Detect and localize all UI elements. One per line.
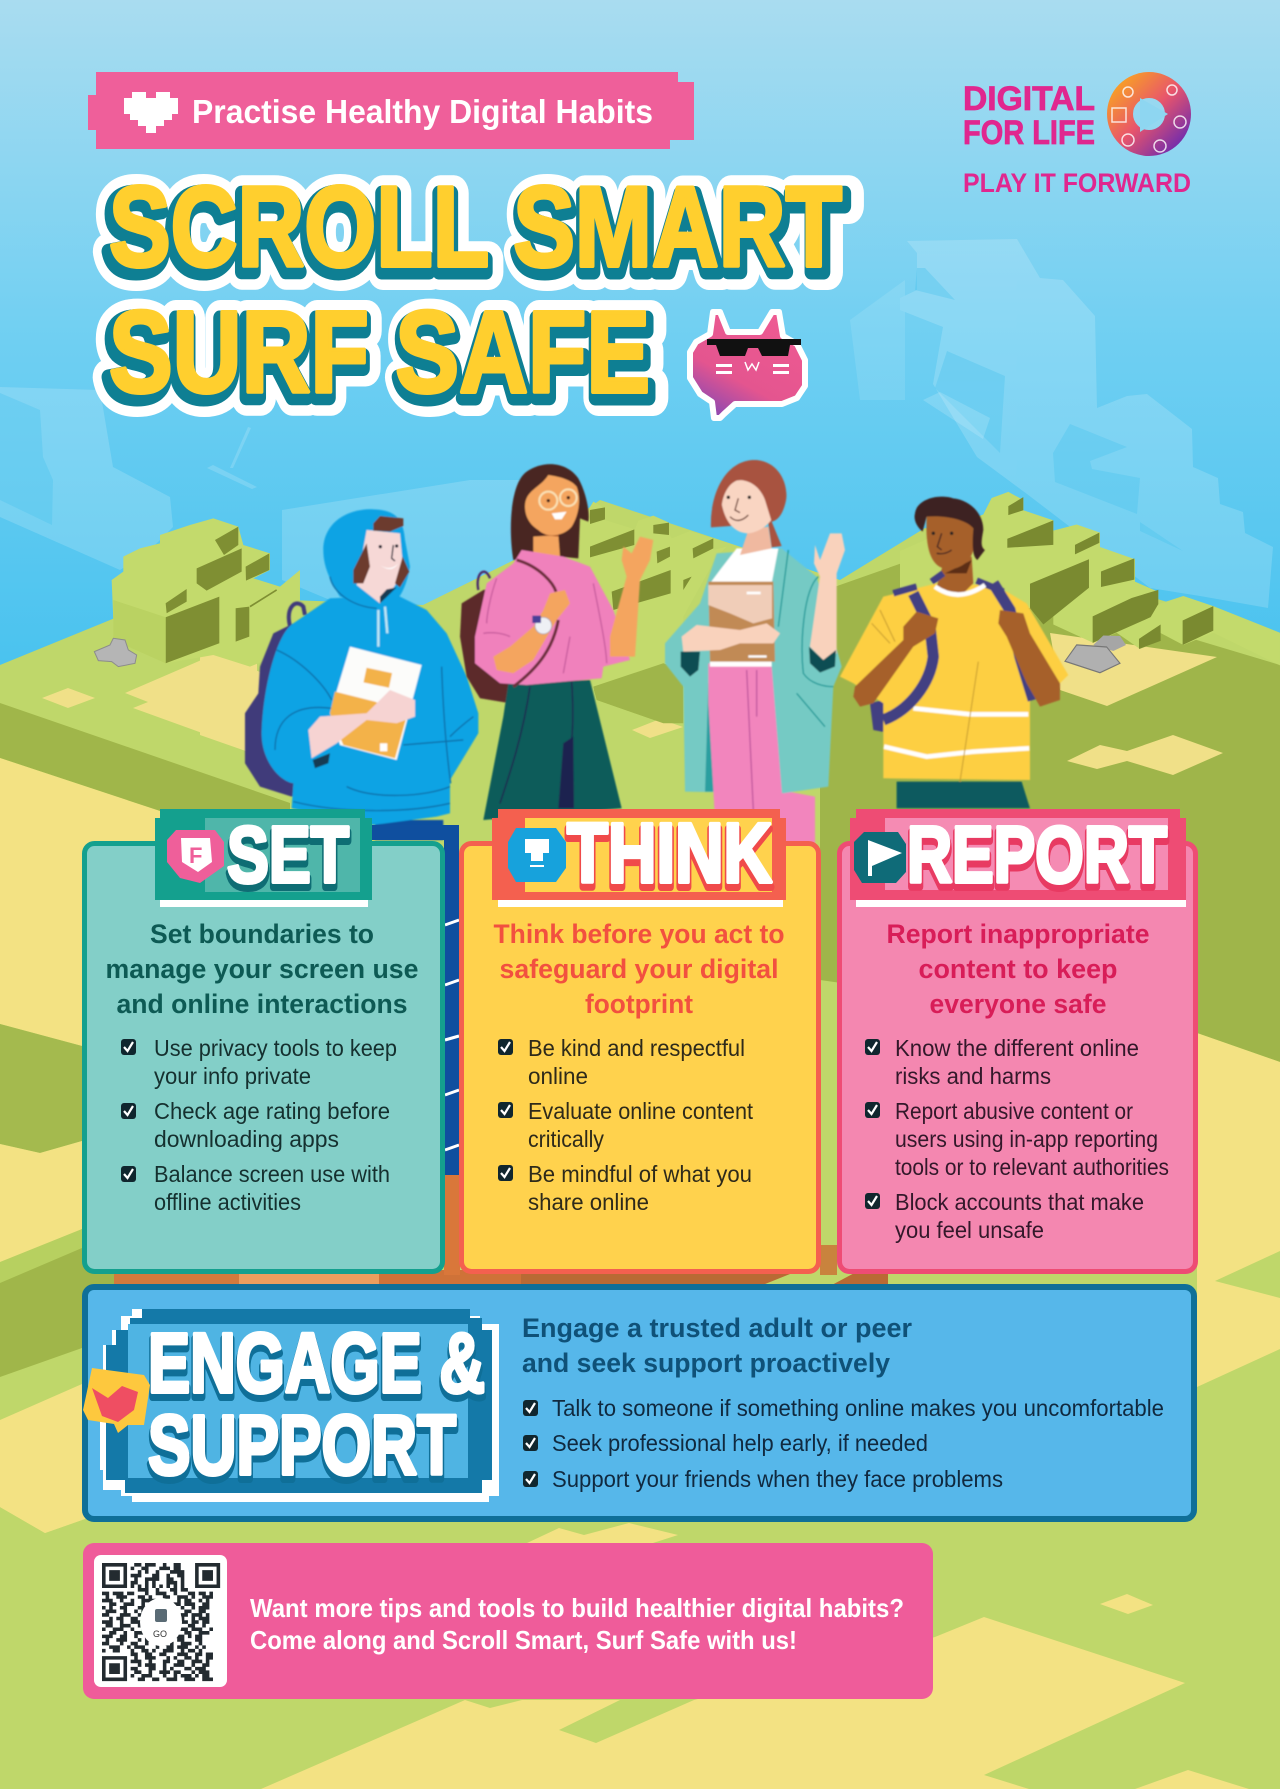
call to action text bbox=[250, 1593, 904, 1655]
logo: Digital for Life bbox=[963, 80, 1191, 198]
clump of blocks left bbox=[94, 518, 300, 667]
shirt bbox=[840, 583, 1068, 782]
person: woman with glasses bbox=[460, 464, 653, 820]
title shadow bbox=[105, 170, 846, 423]
SET label: SET bbox=[227, 810, 349, 899]
trousers bbox=[708, 663, 815, 847]
engage checklist: Support your friends when they face problems bbox=[552, 1466, 1003, 1492]
call to action text: Want more tips and tools to build healthier digital habits? bbox=[250, 1593, 904, 1623]
REPORT checklist: Report abusive content or bbox=[895, 1098, 1133, 1124]
SET heading: and online interactions bbox=[116, 989, 408, 1019]
title fill: SURF SAFE bbox=[109, 287, 650, 417]
REPORT label: REPORT bbox=[907, 815, 1167, 904]
REPORT checklist: Know the different online bbox=[895, 1035, 1139, 1061]
neck and face bbox=[525, 475, 579, 557]
strap tops bbox=[893, 573, 1003, 593]
trousers bbox=[483, 680, 622, 820]
floor strip under cards bbox=[114, 1175, 888, 1286]
hoodie bbox=[262, 509, 478, 825]
SET heading bbox=[106, 919, 418, 1019]
hair bbox=[511, 464, 589, 560]
SET checklist: downloading apps bbox=[154, 1126, 339, 1152]
THINK badge bbox=[492, 806, 786, 907]
icon: lightbulb bbox=[508, 828, 566, 882]
SET badge bbox=[155, 809, 372, 907]
clump of blocks centre bbox=[580, 502, 727, 723]
engage heading bbox=[522, 1313, 912, 1378]
engage checklist: Talk to someone if something online makes you uncomfortable bbox=[552, 1395, 1164, 1421]
THINK checklist: Be kind and respectful bbox=[528, 1035, 745, 1061]
REPORT heading: everyone safe bbox=[930, 989, 1106, 1019]
arm bbox=[308, 690, 415, 768]
collar bbox=[935, 585, 985, 595]
SET checklist: Balance screen use with bbox=[154, 1161, 390, 1187]
neck and head bbox=[915, 497, 985, 597]
call to action text: Come along and Scroll Smart, Surf Safe with us! bbox=[250, 1625, 797, 1655]
icon: pixel heart bbox=[124, 92, 178, 133]
top bbox=[475, 550, 630, 685]
THINK heading: safeguard your digital bbox=[500, 954, 778, 984]
THINK checklist: share online bbox=[528, 1189, 649, 1215]
backpack bbox=[245, 603, 347, 797]
ghost pixel clouds bbox=[0, 239, 1273, 608]
arms bbox=[853, 610, 1060, 707]
icon: cat speech bubble bbox=[690, 312, 805, 418]
THINK heading bbox=[494, 919, 784, 1019]
QR code: GO bbox=[153, 1629, 167, 1639]
book bbox=[708, 582, 775, 662]
REPORT heading: content to keep bbox=[918, 954, 1118, 984]
icon: flag bbox=[854, 832, 906, 883]
trousers between cards bbox=[372, 825, 459, 1175]
banner bbox=[88, 72, 694, 149]
engage label: ENGAGE & bbox=[148, 1321, 485, 1415]
drawstrings bbox=[378, 607, 387, 647]
logo: Digital for Life: DIGITAL bbox=[963, 80, 1095, 118]
THINK checklist: Evaluate online content bbox=[528, 1098, 754, 1124]
engage heading: Engage a trusted adult or peer bbox=[522, 1313, 912, 1343]
arms and strap bbox=[493, 537, 653, 687]
engage label bbox=[148, 1316, 485, 1497]
REPORT checklist: risks and harms bbox=[895, 1063, 1051, 1089]
icon: shield bbox=[167, 830, 224, 883]
title outline bbox=[105, 170, 850, 423]
REPORT checklist: you feel unsafe bbox=[895, 1217, 1044, 1243]
person: woman in cardigan bbox=[665, 460, 845, 847]
SET checklist: Check age rating before bbox=[154, 1098, 390, 1124]
backpack bbox=[460, 572, 513, 703]
panel: SET bbox=[84, 809, 442, 1272]
icon: heart bubble bbox=[83, 1368, 150, 1433]
THINK label: THINK bbox=[567, 806, 772, 900]
engage badge bbox=[83, 1309, 499, 1502]
ground: hills and sand bbox=[0, 500, 1280, 1789]
title shadow: SCROLL SMART bbox=[105, 170, 846, 297]
THINK heading: Think before you act to bbox=[494, 919, 784, 949]
sky background bbox=[0, 0, 1280, 760]
backpack rear bbox=[870, 700, 890, 733]
person: man in yellow tee bbox=[840, 497, 1068, 808]
title shadow: SURF SAFE bbox=[105, 293, 653, 423]
icon: shield: F bbox=[189, 843, 202, 868]
REPORT checklist bbox=[865, 1035, 1169, 1243]
trousers bbox=[375, 820, 443, 840]
SET checklist: offline activities bbox=[154, 1189, 301, 1215]
SET label: SET bbox=[227, 815, 349, 904]
SET checklist: your info private bbox=[154, 1063, 311, 1089]
REPORT heading bbox=[886, 919, 1150, 1019]
REPORT checklist: Block accounts that make bbox=[895, 1189, 1144, 1215]
banner text: Practise Healthy Digital Habits bbox=[192, 93, 653, 130]
THINK checklist bbox=[498, 1035, 754, 1215]
REPORT badge bbox=[850, 809, 1186, 907]
cardigan bbox=[665, 548, 842, 793]
clump of blocks right bbox=[870, 492, 1280, 731]
THINK label: THINK bbox=[567, 811, 772, 905]
engage label: ENGAGE & bbox=[148, 1316, 485, 1410]
engage heading: and seek support proactively bbox=[522, 1348, 890, 1378]
panel: THINK bbox=[462, 806, 818, 1272]
logo: Digital for Life: PLAY IT FORWARD bbox=[963, 168, 1191, 198]
engage label: SUPPORT bbox=[148, 1403, 456, 1497]
title bbox=[105, 164, 850, 423]
person: hoodie student bbox=[245, 509, 478, 840]
straps bbox=[883, 583, 1033, 720]
trousers bbox=[897, 782, 1030, 808]
SET checklist bbox=[121, 1035, 397, 1215]
tee bbox=[710, 548, 778, 667]
engage checklist bbox=[523, 1395, 1164, 1492]
logo ring bbox=[1112, 85, 1186, 152]
title outline: SURF SAFE bbox=[105, 293, 657, 423]
REPORT heading: Report inappropriate bbox=[886, 919, 1150, 949]
engage label: SUPPORT bbox=[148, 1398, 456, 1492]
SET heading: Set boundaries to bbox=[150, 919, 374, 949]
title fill: SCROLL SMART bbox=[109, 164, 842, 291]
THINK checklist: Be mindful of what you bbox=[528, 1161, 752, 1187]
REPORT label: REPORT bbox=[907, 810, 1167, 899]
trousers front bbox=[708, 663, 785, 847]
panel: ENGAGE & SUPPORT bbox=[83, 1287, 1194, 1519]
logo: Digital for Life: FOR LIFE bbox=[963, 114, 1095, 152]
arms bbox=[681, 533, 845, 677]
REPORT checklist: tools or to relevant authorities bbox=[895, 1154, 1169, 1180]
SET checklist: Use privacy tools to keep bbox=[154, 1035, 397, 1061]
engage checklist: Seek professional help early, if needed bbox=[552, 1430, 928, 1456]
panel: call to action bbox=[83, 1543, 933, 1699]
book bbox=[330, 647, 422, 760]
head bbox=[711, 460, 786, 555]
SET heading: manage your screen use bbox=[106, 954, 418, 984]
THINK checklist: critically bbox=[528, 1126, 604, 1152]
REPORT checklist: users using in-app reporting bbox=[895, 1126, 1158, 1152]
title fill bbox=[109, 164, 842, 417]
THINK checklist: online bbox=[528, 1063, 588, 1089]
panel: REPORT bbox=[840, 809, 1196, 1272]
title outline: SCROLL SMART bbox=[105, 170, 850, 297]
QR code bbox=[94, 1555, 227, 1687]
face and hair bbox=[353, 516, 409, 603]
THINK heading: footprint bbox=[585, 989, 693, 1019]
